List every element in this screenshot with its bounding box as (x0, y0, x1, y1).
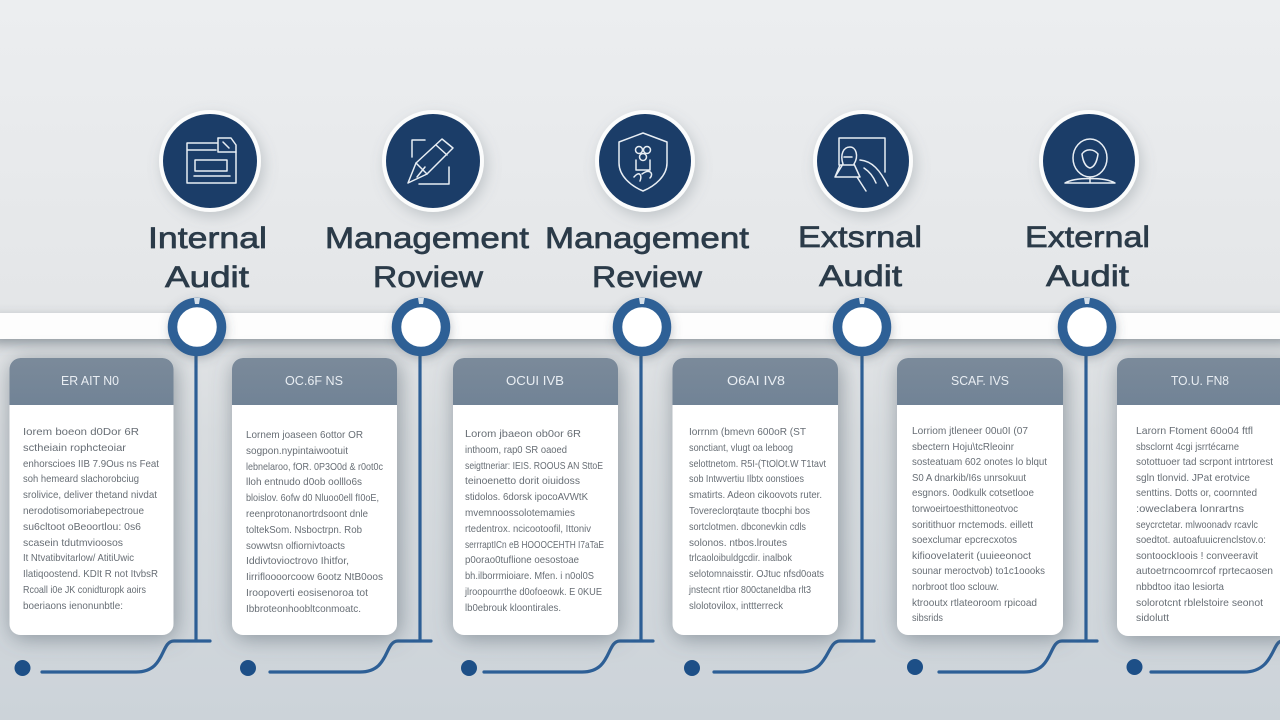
card 6 body text: sgln tlonvid. JPat erotvice (1136, 472, 1250, 484)
card 4 body text: sonctiant, vlugt oa leboog (689, 442, 793, 454)
card 4 body text: selotomnaisstir. OJtuc nfsd0oats (689, 568, 824, 580)
step 2 (325, 110, 530, 294)
card 1 body text: Rcoall i0e JK conidturopk aoirs (23, 584, 146, 596)
panel: card 2 (232, 358, 397, 635)
card 2 body text: reenprotonanortrdsoont dnle (246, 508, 368, 520)
card 6 body text: seycrctetar. mlwoonadv rcavlc (1136, 519, 1258, 531)
heading: External Audit: External (1025, 221, 1150, 254)
card 1 body text (23, 426, 159, 612)
card 6 body text: :oweclabera lonrartns (1136, 503, 1244, 515)
card 5 body text: soexclumar epcrecxotos (912, 534, 1017, 546)
card 5 body text: sounar meroctvob) to1c1oooks (912, 565, 1045, 577)
panel: card 3: OCUI IVB (506, 374, 564, 388)
node 3 (618, 298, 666, 352)
dot 1 (14, 660, 30, 676)
card 6 body text: solorotcnt rblelstoire seonot (1136, 597, 1263, 609)
panel: card 1 (10, 358, 174, 635)
card 5 body text: S0 A dnarkib/I6s unrsokuut (912, 472, 1026, 484)
card 4 body text (688, 426, 826, 612)
card 2 body text: Lornem joaseen 6ottor OR (246, 429, 363, 441)
icon: pencil (382, 110, 484, 212)
card 2 body text: lloh entnudo d0ob oolllo6s (246, 476, 362, 488)
card 2 body text: Iddivtovioctrovo Ihitfor, (246, 555, 349, 567)
timeline track (0, 313, 1280, 339)
heading: Management Review: Roview (373, 261, 483, 294)
heading: Extsrnal Audit: Extsrnal (798, 221, 922, 254)
card 2 body text: Iirrifloooorcoow 6ootz NtB0oos (246, 571, 383, 583)
panel: card 4 (672, 358, 838, 635)
card 4 body text: slolotovilox, inttterreck (689, 600, 784, 612)
heading: External Audit: Audit (1046, 260, 1130, 293)
heading: Extsrnal Audit (798, 221, 922, 293)
card 5 body text (912, 425, 1047, 624)
timeline nodes (172, 298, 1112, 352)
node 2 (396, 298, 446, 352)
card 5 body text: torwoeirtoesthittoneotvoc (912, 503, 1018, 515)
card 4 body text: sob Intwvertiu Ilbtx oonstioes (689, 473, 804, 485)
step 5 (1025, 110, 1150, 293)
card 6 body text: senttins. Dotts or, coornnted (1136, 487, 1257, 499)
connector 5 (939, 350, 1097, 672)
panel: card 5: SCAF. IVS (951, 374, 1009, 388)
dot 3 (461, 660, 477, 676)
panel: card 4: O6AI IV8 (727, 374, 785, 388)
step 4 (798, 110, 922, 293)
card 1 body text: Ilatiqoostend. KDIt R not ItvbsR (23, 568, 158, 580)
card 2 body text: Iroopoverti eosisenoroa tot (246, 587, 368, 599)
card 3 body text: p0orao0tuflione oesostoae (465, 554, 579, 566)
card 3 body text: Lorom jbaeon ob0or 6R (465, 428, 581, 440)
icon: document (159, 110, 261, 212)
card 1 body text: su6cltoot oBeoortlou: 0s6 (23, 521, 141, 533)
heading: External Audit (1025, 221, 1150, 293)
connector 6 (1151, 641, 1280, 672)
card 3 body text: inthoom, rap0 SR oaoed (465, 444, 567, 456)
heading: Management Review: Review (592, 261, 702, 294)
card 1 body text: Iorem boeon d0Dor 6R (23, 426, 139, 438)
card 4 body text: Iorrnm (bmevn 600oR (ST (689, 426, 807, 438)
card 6 body text: Larorn Ftoment 60o04 ftfl (1136, 425, 1253, 437)
dot 4 (684, 660, 700, 676)
heading: Management Review (325, 222, 530, 294)
card 5 body text: esgnors. 0odkulk cotsetlooe (912, 487, 1034, 499)
card 3 body text: stidolos. 6dorsk ipocoAVWtK (465, 491, 588, 503)
card 1 body text: enhorscioes IIB 7.9Ous ns Feat (23, 458, 159, 470)
heading: Internal Audit: Internal (148, 222, 267, 255)
card 3 body text: seigttneriar: IEIS. ROOUS AN SttoE (465, 460, 603, 472)
card 1 body text: srolivice, deliver thetand nivdat (23, 489, 157, 501)
step 3 (545, 110, 750, 294)
card 5 body text: sosteatuam 602 onotes lo blqut (912, 456, 1047, 468)
dot 2 (240, 660, 256, 676)
icon: person at screen (813, 110, 913, 212)
panel: card 6 (1117, 358, 1280, 636)
heading: Internal Audit (148, 222, 267, 294)
card 1 body text: nerodotisomoriabepectroue (23, 505, 144, 517)
card 2 body text: Ibbroteonhoobltconmoatc. (246, 603, 361, 615)
node 5 (1062, 298, 1112, 352)
card 1 body text: boeriaons ienonunbtle: (23, 600, 123, 612)
card 3 body text: jlroopourrthe d0ofoeowk. E 0KUE (464, 586, 602, 598)
card 1 body text: soh hemeard slachorobciug (23, 473, 139, 485)
card 5 body text: sbectern Hoju\tcRleoinr (912, 441, 1014, 453)
card 4 body text: jnstecnt rtior 800ctaneIdba rlt3 (688, 584, 811, 596)
connector 2 (270, 350, 431, 672)
card 1 body text: sctheiain rophcteoiar (23, 442, 127, 454)
card 4 body text: Tovereclorqtaute tbocphi bos (689, 505, 810, 517)
node 4 (838, 298, 886, 352)
node 1 (172, 298, 222, 352)
icon: shield (595, 110, 695, 212)
card 6 body text: autoetrncoomrcof rprtecaosen (1136, 565, 1273, 577)
card 6 body text: soedtot. autoafuuicrenclstov.o: (1136, 534, 1266, 546)
card 3 body text (464, 428, 604, 614)
card 5 body text: sibsrids (912, 612, 943, 624)
step 1 (148, 110, 267, 294)
panel: card 1: ER AIT N0 (61, 374, 119, 388)
card 5 body text: soritithuor rnctemods. eillett (912, 519, 1033, 531)
heading: Internal Audit: Audit (165, 261, 250, 294)
heading: Management Review (545, 222, 750, 294)
card 6 body text (1136, 425, 1273, 624)
card 3 body text: rtedentrox. ncicootoofil, Ittoniv (465, 523, 592, 535)
card 1 body text: scasein tdutmvioosos (23, 537, 123, 549)
card 2 body text: bloislov. 6ofw d0 Nluoo0ell fI0oE, (246, 492, 379, 504)
card 3 body text: mvemnoossolotemamies (465, 507, 575, 519)
heading: Management Review: Management (325, 222, 530, 255)
card 6 body text: sotottuoer tad scrpont intrtorest (1136, 456, 1273, 468)
connector 1 (42, 350, 210, 672)
panel: card 3 (453, 358, 618, 635)
card 3 body text: bh.ilborrmioiare. Mfen. i n0ol0S (465, 570, 594, 582)
card 5 body text: norbroot tloo sclouw. (912, 581, 999, 593)
card 1 body text: It Ntvatibvitarlow/ AtitiUwic (23, 552, 134, 564)
card 6 body text: sidolutt (1136, 612, 1169, 624)
panel: card 6: TO.U. FN8 (1171, 374, 1229, 388)
dot 5 (907, 659, 923, 675)
card 5 body text: ktrooutx rtlateoroom rpicoad (912, 597, 1037, 609)
card 4 body text: trlcaoloibuldgcdir. inalbok (689, 552, 793, 564)
card 2 body text: lebnelaroo, fOR. 0P3O0d & r0ot0c (246, 461, 383, 473)
card 5 body text: Lorriom jtleneer 00u0I (07 (912, 425, 1028, 437)
card 4 body text: solonos. ntbos.lroutes (689, 537, 787, 549)
connector 4 (714, 350, 874, 672)
heading: Extsrnal Audit: Audit (819, 260, 903, 293)
connector lines (42, 350, 1280, 672)
timeline dots (14, 659, 1142, 676)
card 2 body text: sowwtsn olfiornivtoacts (246, 540, 345, 552)
heading: Management Review: Management (545, 222, 750, 255)
card 6 body text: sontoockIoois ! conveeravit (1136, 550, 1258, 562)
card 4 body text: smatirts. Adeon cikoovots ruter. (689, 489, 822, 501)
panel: card 2: OC.6F NS (285, 374, 343, 388)
icon: webcam (1039, 110, 1139, 212)
card 3 body text: serrraptICn eB HOOOCEHTH I7aTaE (465, 539, 604, 551)
card 3 body text: lb0ebrouk kloontirales. (465, 602, 561, 614)
card 5 body text: kifiooveIaterit (uuieeonoct (912, 550, 1031, 562)
card 6 body text: sbsclornt 4cgi jsrrtécarne (1136, 441, 1239, 453)
dot 6 (1126, 659, 1142, 675)
connector 3 (484, 350, 653, 672)
card 4 body text: selottnetom. R5I-(TtOlOt.W T1tavt (689, 458, 826, 470)
card 2 body text: sogpon.nypintaiwootuit (246, 445, 348, 457)
panel: card 5 (897, 358, 1063, 635)
card 3 body text: teinoenetto dorit oiuidoss (465, 475, 580, 487)
card 6 body text: nbbdtoo itao lesiorta (1136, 581, 1224, 593)
card 2 body text (246, 429, 383, 615)
card 2 body text: toltekSom. Nsboctrpn. Rob (246, 524, 362, 536)
card 4 body text: sortclotmen. dbconevkin cdls (689, 521, 806, 533)
